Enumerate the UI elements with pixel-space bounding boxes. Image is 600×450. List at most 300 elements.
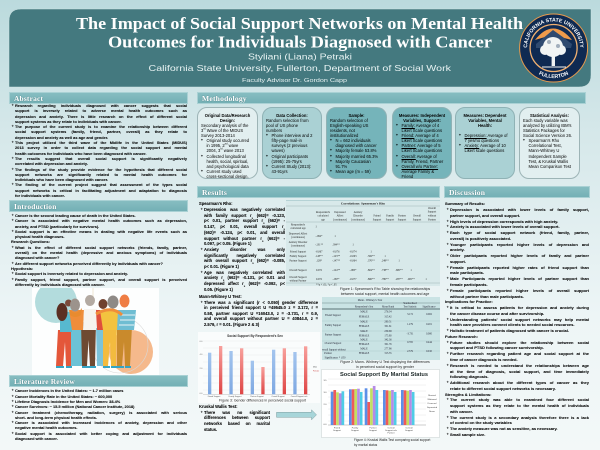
panel: statistical analysis: Spearman's Rho	[528, 138, 559, 143]
text block: abstract bullets: support networks is critical in facilitating adjustment and adaptation to diagnosis	[15, 188, 187, 193]
panel: independent variables measures: Friend: Average of 4	[402, 133, 439, 138]
panel: dependent variables measures: Likert scale questions	[464, 148, 504, 153]
text block: discussion: male participants.	[450, 270, 484, 275]
panel: data collection: Original participants	[272, 154, 308, 158]
text block: introduction: Hypothesis:	[11, 266, 33, 271]
chart: Mann-Whitney U test table: Family Support	[325, 324, 341, 327]
chart: Spearman correlation table: without Partner	[290, 280, 306, 282]
chart: Mann-Whitney U test table: Partner Support	[325, 334, 341, 336]
chart: Mann-Whitney U test table: 0.002	[426, 313, 433, 316]
panel: independent variables measures: Overall: Average of	[402, 154, 437, 158]
icon: university seal: FULLERTON	[538, 71, 568, 78]
chart: Spearman correlation table: -.124**	[332, 269, 341, 272]
panel: sample: Sample:	[348, 112, 365, 118]
text block: discussion: Future studies should explore the relationship between social	[450, 340, 589, 345]
text block: discussion: Understanding patients' social support networks may help mental	[450, 317, 589, 322]
panel: original data and research design: Survey 2013-2014	[201, 133, 235, 138]
text block: discussion: Holistic treatment of patients diagnosed with cancer is crucial.	[450, 328, 569, 333]
panel: statistical analysis: Statistics Packages for	[523, 128, 565, 133]
panel: data collection: Data Collection:	[276, 112, 308, 118]
panel: sample: Majority female 53.8%	[336, 148, 376, 153]
chart: Spearman correlation table: Support	[373, 218, 382, 222]
heading: Introduction: Introduction	[14, 202, 57, 211]
text block: Spearman's Rho results: Age was negatively correlated with	[204, 270, 285, 275]
chart: Mann-Whitney U test table: MALE	[360, 338, 368, 342]
chart: Spearman correlation table: Depressed Affect	[289, 232, 308, 236]
chart: Spearman correlation table	[286, 200, 440, 286]
text block: literature review bullets: Lifetime Diagnosis Incidence for Men and Women: 38.4%	[15, 399, 120, 404]
heading: Methodology	[197, 92, 586, 104]
chart: Spearman correlation table: Partner Support	[290, 260, 307, 262]
text block: literature review bullets: negative mental health outcomes.	[15, 425, 77, 430]
chart: Mann-Whitney U test table: 301.76	[384, 343, 392, 346]
panel: dependent variables measures: 7 yes/no questions	[464, 138, 499, 143]
chart: social support by marital status: Family	[352, 428, 359, 430]
chart: Spearman correlation table: 1	[384, 255, 386, 258]
text block: literature review bullets: Cancer Survivors: ~ 15.5 million (National Cancer Institute, 2018)	[15, 404, 134, 409]
panel: original data and research design: 2004, 3rd wave 2013	[206, 148, 244, 153]
chart: Mann-Whitney U test table: 0.010	[426, 350, 433, 353]
text block: abstract bullets: support is inversely related to adverse mental health outcomes such as	[15, 108, 187, 113]
chart: social support by marital status: Support	[351, 429, 359, 432]
panel: statistical analysis: analyzed by utilizing IBM's	[523, 123, 571, 128]
text block: discussion: Older participants reported higher levels of family and partner	[450, 253, 589, 258]
chart: social support by marital status: Separated	[427, 406, 438, 409]
text block: Kruskal Wallis test	[199, 404, 270, 432]
text block: discussion: Each type of social support network (friend, family, partner,	[450, 230, 589, 235]
title: The Impact of Social Support Networks on Mental Health	[76, 14, 523, 33]
text block: discussion: following diagnosis.	[450, 374, 488, 379]
chart: Mann-Whitney U test table: 175.80	[384, 334, 392, 338]
text block: discussion: support and PTSD following cancer survivorship.	[450, 345, 544, 350]
text block: discussion: Strengths & Limitations:	[445, 392, 491, 397]
chart: Spearman correlation table: age	[321, 218, 326, 222]
title: Outcomes for Individuals Diagnosed with Cancer	[108, 32, 492, 52]
chart: Spearman correlation table: Support	[413, 218, 422, 222]
text block: abstract bullets: health outcomes for individuals who have been diagnosed with cancer.	[15, 151, 146, 156]
text block: discussion: female participants.	[450, 282, 488, 287]
text block: discussion: time of cancer diagnosis is needed.	[450, 357, 518, 362]
text block: discussion: Depression is associated with lower levels of family support,	[450, 207, 589, 212]
text block: Mann-Whitney U test results	[199, 294, 318, 327]
chart: Spearman correlation table: (continuous)	[291, 236, 305, 239]
text block: discussion: without partner than male participants.	[450, 294, 524, 299]
chart: social support by marital status: 3.5	[323, 380, 327, 382]
caption: figure 1: between social support, mental health outcomes and age	[341, 292, 429, 296]
chart: social support by respondent's sex: 0.0	[200, 393, 202, 395]
caption: figure 2: in perceived social support by gender	[356, 364, 414, 368]
panel: independent variables measures: Family, Friend, Partner	[402, 159, 443, 164]
text block: Mann-Whitney U test results: 2.579, r = 0.01. (Figure 2 & 3)	[204, 322, 259, 327]
panel: independent variables measures: Friend	[402, 174, 413, 179]
panel: original data and research design: Secondary analysis of the	[201, 123, 248, 128]
panel: sample: residents, not	[330, 128, 355, 133]
chart: social support by marital status: Partner	[387, 432, 395, 434]
chart: Spearman correlation table: 1	[315, 226, 317, 228]
heads	[56, 303, 68, 321]
chart: Spearman correlation table: -0.063	[350, 255, 357, 258]
chart: social support by respondent's sex: Social Support By Respondent's Sex	[227, 334, 283, 338]
panel: independent variables measures: Partner: Average of 5	[402, 143, 441, 148]
chart: Mann-Whitney U test table: 239.68	[384, 330, 392, 333]
text block: introduction: What is the effect of different social support networks (friends, family, partner,	[15, 245, 187, 250]
caption: figure 2	[340, 360, 430, 369]
text block: discussion: relate to different social support networks is necessary.	[450, 386, 556, 391]
chart: Mann-Whitney U test table: 313.35	[384, 352, 392, 355]
chart: Spearman correlation table: Overall Support	[289, 276, 307, 279]
panel: sample: institutionalized	[330, 133, 358, 138]
chart: Spearman correlation table: -.092*	[316, 235, 323, 238]
chart: social support by respondent's sex: 2.0	[200, 368, 202, 370]
chart: Mann-Whitney U test table: Partner	[324, 352, 332, 355]
torsos	[60, 312, 72, 332]
panel: sample: N = 662 individuals	[336, 138, 371, 143]
panel: statistical analysis: Statistical Analysis:	[530, 112, 569, 118]
panel: data collection: fifty-page mail-in	[272, 138, 302, 143]
panel: independent variables measures: Overall w/o Partner:	[402, 164, 438, 169]
chart: Spearman correlation table: .370**	[367, 260, 375, 262]
chart: Mann-Whitney U test table: 276.34	[384, 310, 392, 314]
text block: discussion: overall) is positively associated.	[450, 236, 511, 241]
chart: Spearman correlation table: -0.077	[350, 278, 357, 281]
bars	[331, 386, 414, 425]
chart: Spearman correlation table: -.131**	[315, 243, 324, 246]
heading: Abstract	[9, 92, 188, 104]
illustration: group of friends embracing	[32, 288, 159, 375]
text block: Mann-Whitney U test results: in perceived friend support U =49545.0 z = 3.172, r =	[204, 305, 318, 310]
chart: Mann-Whitney U test table: 0.765	[407, 341, 414, 344]
chart: social support by marital status: Support	[405, 429, 413, 432]
title	[76, 14, 523, 52]
icon: university seal: CALIFORNIA STATE UNIVERSITY	[524, 18, 584, 48]
chart: social support by marital status: Widowed	[428, 399, 437, 401]
text block: Spearman's Rho results: Depression was negatively correlated	[204, 207, 285, 212]
chart: social support by marital status: Friend	[334, 426, 341, 430]
chart: Mann-Whitney U test table: Respondent's Sex	[355, 306, 374, 308]
chart: Mann-Whitney U test table: MALE	[360, 348, 368, 350]
header banner with title, authors and seal	[9, 8, 592, 87]
text block: abstract bullets: The results suggest that overall social support is significantly negatively	[15, 156, 187, 161]
text block: Spearman's Rho results: depressed affect r s (662)= -0.092, p<	[204, 281, 285, 288]
chart: social support by marital status: Never	[429, 410, 435, 413]
chart: Mann-Whitney U test table: 1.279	[407, 323, 414, 326]
chart: Mann-Whitney U test table: 280.51	[384, 320, 392, 324]
chart: Spearman correlation table: Family	[386, 214, 394, 218]
chart: Spearman correlation table: Support	[428, 210, 437, 214]
panel: sample: Random selection of	[330, 118, 368, 123]
chart: Spearman correlation table: Correlations: Spearman's Rho	[341, 202, 385, 206]
caption: figure 1	[340, 286, 430, 296]
chart: Mann-Whitney U test table: 0.000	[426, 332, 433, 336]
text block: discussion: at the time of diagnosis, social support, and time immediately	[450, 368, 589, 374]
text block: introduction: Social support is an effective means in dealing with negative life events such as	[15, 229, 187, 234]
panel: original data and research design: Original study occurred	[206, 138, 249, 143]
heading: Discussion	[444, 186, 590, 198]
text block: literature review bullets	[12, 388, 187, 441]
chart: Spearman correlation table: .128**	[315, 255, 323, 258]
text block: discussion: High levels of depression corresponds with high anxiety.	[450, 219, 558, 224]
caption: figure 4	[354, 438, 430, 447]
text block: Mann-Whitney U test results: There was a significant (r < 0.050) gender difference	[204, 300, 318, 305]
text block: abstract bullets: Research regarding individuals diagnosed with cancer suggests that social	[15, 103, 187, 108]
panel: statistical analysis: Independent Sample	[528, 154, 567, 158]
text block: Mann-Whitney U test results: and overall support without partner U = 40844.0, z =	[204, 316, 318, 321]
chart: Spearman correlation table: .394**	[332, 243, 340, 246]
chart: Mann-Whitney U test table: Mann - Whitney U Test	[358, 299, 383, 302]
text block: discussion: Younger participants reported higher levels of depression and	[450, 242, 589, 247]
text block: Spearman's Rho results: p< 0.01. (Figure 1)	[204, 264, 239, 269]
text block: Spearman's Rho results: Spearman's Rho:	[199, 201, 233, 206]
panel: independent variables measures: Likert Scale questions	[402, 148, 442, 153]
chart: social support by respondent's sex: Friend Support	[208, 395, 221, 398]
text block: abstract bullets: depression and anxiety as well as age and gender.	[15, 135, 108, 140]
chart: Spearman correlation table: -.085*	[350, 269, 357, 272]
heading: Methodology: Methodology	[202, 94, 247, 103]
panel: original data and research design: in 1995, 2nd wave	[206, 143, 238, 148]
chart: social support by marital status: Partner	[369, 426, 377, 430]
text block: abstract bullets	[12, 103, 188, 198]
text block: discussion: with cancer.	[450, 409, 473, 414]
chart: Spearman correlation table: Partner	[398, 214, 406, 218]
panel: statistical analysis: Each study variable was	[523, 118, 568, 123]
panel: original data and research design: Current study used	[206, 169, 241, 174]
panel: statistical analysis: Social Science Version 26.	[523, 133, 572, 138]
text block: discussion: Female participants reported higher levels of overall support	[450, 288, 589, 293]
text block: Spearman's Rho results: (662)= -0.124, p< 0.01, and overall	[204, 230, 285, 235]
chart: Spearman correlation table: .128*	[316, 260, 323, 262]
text block: introduction: Social support is inversely related to depression and anxiety.	[15, 271, 128, 276]
chart: social support by respondent's sex: 4.0	[200, 354, 202, 356]
chart: Mann-Whitney U test table: 277.96	[384, 348, 392, 350]
heading: Introduction	[9, 200, 188, 212]
chart: Spearman correlation table: Affect	[337, 214, 344, 218]
panel: independent variables measures: Likert Scale questions	[402, 138, 442, 143]
text block: Spearman's Rho results: significantly negatively correlated	[204, 253, 285, 258]
text block: Spearman's Rho results: 0.05. (Figure 1)	[204, 287, 233, 292]
heading: Results: Results	[202, 188, 227, 197]
text block: Mann-Whitney U test results: 0.58, partner support U =16043.0, z = -3.731, r = 0.9,	[204, 311, 318, 316]
chart: social support by marital status: Support	[333, 429, 341, 432]
panel: independent variables measures: Average Family &	[402, 169, 434, 174]
chart: Spearman correlation table: .582**	[367, 255, 375, 258]
panel: original data and research design: Design:	[220, 118, 235, 123]
chart: Mann-Whitney U test table: 342.36	[384, 338, 392, 342]
panel: data collection: Random selection from	[266, 118, 309, 123]
chart: Spearman correlation table: -0.074	[350, 250, 357, 254]
chart: Spearman correlation table: without	[428, 214, 436, 218]
chart: Spearman correlation table: Support	[398, 218, 407, 222]
chart: Spearman correlation table: -.147**	[332, 260, 341, 262]
chart: Spearman correlation table: calculated age	[290, 227, 306, 230]
panel: original data and research design: health, social, spiritual,	[206, 159, 248, 164]
chart: Spearman correlation table: .685**	[395, 269, 403, 272]
chart: Mann-Whitney U test table: MALE	[360, 310, 368, 314]
panel: statistical analysis	[519, 107, 580, 179]
text block: Spearman's Rho results: 0.147, p< 0.01, overall support r s	[204, 224, 285, 231]
chart: social support by marital status: Support w/o	[385, 429, 398, 432]
text block: abstract bullets: correlated with depression and anxiety.	[15, 161, 88, 166]
panel: dependent variables measures: Depression: Average of	[464, 133, 507, 138]
chart: Spearman correlation table: Overall	[413, 214, 421, 218]
chart: Mann-Whitney U test table: 2.579	[407, 350, 414, 353]
text block: Kruskal Wallis test: differences between support	[204, 415, 270, 420]
panel: dependent variables measures	[455, 107, 515, 179]
text block: literature review bullets: short- and long-term physical health effects.	[15, 415, 97, 420]
chart: Spearman correlation table: (continuous)	[333, 218, 347, 222]
panel: data collection: Current Study (2013):	[272, 164, 311, 169]
text block: discussion: It is critical to assess patients for depression and anxiety during	[450, 305, 589, 310]
caption: figure 4: by marital status	[354, 443, 377, 447]
chart: social support by marital status: Overall	[388, 426, 395, 430]
panel: data collection: (1995): 25-75yrs	[272, 159, 302, 164]
panel: original data and research design: and psychological data	[206, 164, 249, 169]
text block: abstract bullets: The findings of the study provide evidence for the hypothesis that different social	[15, 167, 187, 172]
chart: Spearman correlation table: .860**	[367, 278, 375, 281]
text block: Spearman's Rho results: support without partner r s (662)= -	[204, 236, 285, 242]
text block: discussion: support.	[450, 259, 466, 264]
chart: social support by respondent's sex	[198, 332, 320, 403]
text block: discussion: Female participants reported higher rates of friend support than	[450, 265, 589, 270]
chart: Spearman correlation table: Family Support	[290, 255, 307, 258]
chart: Spearman correlation table: -0.064	[350, 260, 357, 262]
panel: independent variables measures: Variables, Support:	[403, 118, 441, 123]
panel: statistical analysis: Test, & Kruskal Wallis	[528, 159, 568, 164]
chart: Spearman correlation table: 1	[425, 278, 427, 281]
authors and affiliation	[148, 52, 452, 84]
chart: Mann-Whitney U test table: Standardized	[403, 302, 417, 305]
text block: Spearman's Rho results: Anxiety disorder was only	[204, 247, 285, 252]
panel: independent variables measures	[392, 107, 452, 179]
chart: Spearman correlation table: Anxiety Disorder	[289, 241, 307, 244]
chart: Spearman correlation table: -.097*	[333, 278, 340, 281]
chart: Spearman correlation table: .780**	[381, 278, 389, 281]
chart: Mann-Whitney U test table: 301.61	[384, 325, 392, 328]
text block: discussion: of control on the study variables	[450, 420, 512, 425]
text block: Mann-Whitney U test results: Mann-Whitney U Test:	[199, 294, 242, 299]
text block: Spearman's Rho results: with overall support r s (662)= -0.085,	[204, 258, 285, 265]
chart: social support by respondent's sex: Overall Support w/o	[291, 395, 307, 398]
chart: Spearman correlation table: .905**	[407, 278, 415, 281]
text block: discussion: health care providers connect clients to needed social resources.	[450, 322, 574, 327]
chart: Mann-Whitney U test table: MALE	[360, 320, 368, 324]
chart: Mann-Whitney U test table: -3.731	[407, 332, 414, 336]
text block: abstract bullets: individuals who have been diagnosed with cancer.	[15, 177, 108, 182]
text block: discussion: Research is needed to understand the relationships between age	[450, 363, 589, 368]
chart: Spearman correlation table: 1	[370, 250, 372, 254]
text block: introduction: Cancer is the second leading cause of death in the United States.	[15, 213, 136, 218]
panel: data collection: Phone interview and 2	[272, 133, 312, 138]
chart: Spearman correlation table: Depressed	[334, 211, 346, 214]
chart: Spearman correlation table: -.123**	[332, 255, 341, 258]
chart: Mann-Whitney U test table: Test Statistic	[403, 306, 417, 308]
chart: Mann-Whitney U test table: FEMALE	[359, 334, 370, 338]
chart: Mann-Whitney U test table: FEMALE	[359, 352, 370, 355]
chart: social support by marital status: Divorced	[428, 402, 437, 405]
panel: statistical analysis: Mann-Whitney U	[528, 148, 559, 153]
text block: discussion: Anxiety is associated with lower levels of overall support.	[450, 224, 560, 229]
heading: Literature Review: Literature Review	[14, 377, 75, 386]
text block: literature review bullets: Social support is associated with better coping and adjustment for individuals	[15, 431, 187, 436]
text block: discussion: Implications for Practice:	[445, 299, 493, 304]
text block: introduction: Family support, friend support, partner support, and overall support is perceived	[15, 277, 187, 282]
chart: social support by marital status: Support	[369, 429, 377, 432]
chart: Spearman correlation table: (continuous)	[291, 244, 305, 248]
chart: Spearman correlation table: 1	[334, 235, 336, 238]
text block: introduction: physical health diagnoses.	[15, 234, 65, 239]
chart: social support by respondent's sex: Female	[313, 370, 319, 372]
text block: literature review bullets: Cancer Mortality Rate in the United States: ~ 600,000	[15, 394, 112, 399]
panel: original data and research design: Original Data/Research	[205, 112, 250, 118]
text block: Kruskal Wallis test: status.	[204, 427, 217, 432]
text block: discussion: Further research regarding patient age and social support at the	[450, 351, 589, 356]
text block: abstract bullets: support systems as they relate to individuals with cancer.	[15, 119, 122, 124]
arrow: Kruskal Wallis to figure 4	[276, 410, 317, 420]
text block: discussion: Future Research:	[445, 334, 478, 339]
chart: Spearman correlation table: .738**	[381, 269, 389, 272]
text block: abstract bullets: support networks are significantly related to mental health outcomes for	[15, 172, 187, 177]
text block: abstract bullets: This project utilized the third wave of the Midlife in the United States (MIDUS)	[15, 140, 187, 145]
panel: original data and research design: Collected longitudinal	[206, 154, 246, 158]
panel: sample: Majority Caucasian	[336, 159, 371, 164]
caption: figure 3: Figure 3: Gender differences in perceived social support	[219, 398, 306, 402]
text block: discussion: Male Participants reported higher levels of partner support than	[450, 276, 589, 281]
chart: Spearman correlation table: 0.072	[316, 278, 323, 281]
chart: social support by respondent's sex: Male	[313, 366, 317, 368]
chart: social support by respondent's sex: Overall Support	[271, 395, 285, 398]
chart: Spearman correlation table: calculated	[318, 214, 329, 218]
chart: Mann-Whitney U test table: 315.42	[384, 316, 392, 318]
text block: Kruskal Wallis test: networks based on marital	[204, 421, 270, 426]
heading: Results	[197, 186, 440, 198]
text block: Spearman's Rho results: with family support r s (662)= -0.123,	[204, 213, 285, 219]
authors and affiliation: California State University, Fullerton, Department of Social Work	[148, 63, 452, 73]
panel: independent variables measures: Likert Scale questions	[402, 128, 442, 133]
text block: abstract bullets: depression and anxiety. There is little research on the effect of different social	[15, 114, 187, 119]
chart: Spearman correlation table: 0.072	[316, 269, 323, 272]
text block: literature review bullets: Cancer is associated with increased incidences of anxiety, depression and other	[15, 420, 187, 425]
chart: Spearman correlation table: .248**	[381, 260, 389, 262]
panel: independent variables measures: Family: Average of 4	[402, 123, 439, 128]
text block: literature review bullets: Cancer treatment (chemotherapy, radiation, surgery) is associated with serious	[15, 410, 187, 415]
chart: social support by respondent's sex: Family Support	[229, 395, 242, 398]
text block: introduction	[11, 213, 187, 287]
chart: Mann-Whitney U test table: MALE	[360, 330, 368, 333]
chart: Spearman correlation table: .287**	[395, 278, 403, 281]
chart: Spearman correlation table: Friend Support	[290, 250, 306, 254]
chart: social support by marital status: 3.0	[323, 392, 327, 394]
text block: introduction: anxiety, and PTSD (particularly for survivors).	[15, 224, 99, 229]
heading: Discussion: Discussion	[449, 188, 485, 197]
panel: sample	[326, 107, 387, 179]
legs	[56, 330, 73, 366]
authors and affiliation: Faculty Advisor Dr. Gordon Capp	[242, 78, 347, 84]
text block: abstract bullets: The finding of the current project suggest that assessment of the types social	[15, 182, 187, 187]
text block: introduction: differently by individuals diagnosed with cancer.	[15, 282, 105, 287]
chart: social support by marital status: Overall	[406, 426, 413, 430]
text block: abstract bullets: social support systems (family, friend, partner, overall) as they relate to	[15, 129, 187, 134]
text block: Kruskal Wallis test: Kruskal Wallis Test:	[199, 404, 237, 409]
chart: Spearman correlation table: Disorder	[353, 214, 363, 218]
chart: Spearman correlation table: Respondent's	[291, 224, 305, 226]
panel: dependent variables measures: Measures: Dependent	[463, 112, 507, 118]
chart: Spearman correlation table: Overall Support	[289, 269, 307, 272]
chart: Spearman correlation table: .804**	[367, 269, 375, 272]
panel: sample: 91.7%	[336, 164, 347, 169]
chart: Mann-Whitney U test table	[322, 297, 440, 360]
text block: introduction: Cancer is associated with negative mental health outcomes such as depression,	[15, 218, 187, 223]
chart: social support by marital status: Social Support By Marital Status	[340, 372, 428, 378]
text block: discussion: support systems as they relate to the mental health of individuals	[450, 403, 589, 408]
